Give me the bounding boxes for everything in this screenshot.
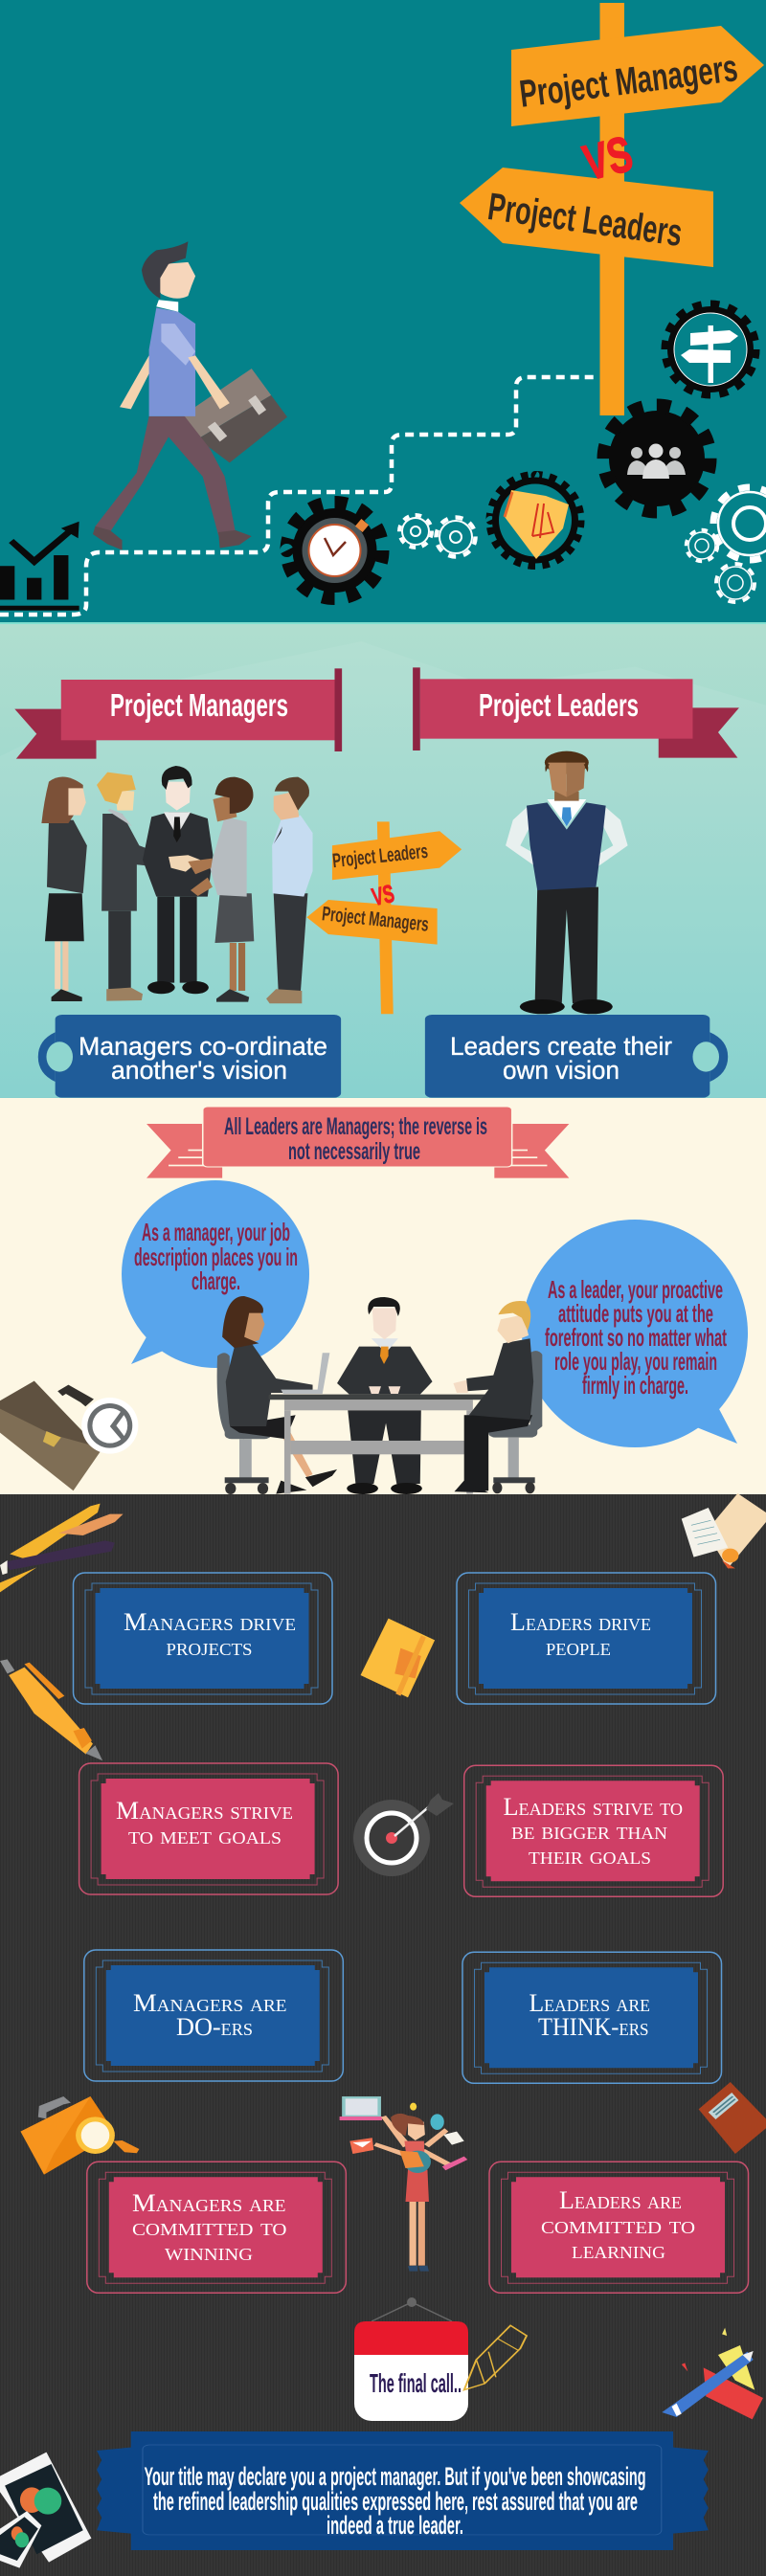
illustration: three people meeting at a table (217, 1296, 542, 1494)
tag: leaders vision (425, 1015, 728, 1098)
icon: white gears right edge (686, 487, 766, 602)
ribbon: all leaders are managers (146, 1107, 569, 1178)
icon: outlined pencil (464, 2325, 527, 2390)
small vs label: VS (370, 879, 396, 911)
ribbon: all leaders are managers: All Leaders are Managers; the reverse is (224, 1113, 487, 1140)
panel: hero signpost journey (0, 0, 766, 622)
illustration: group of five managers (41, 766, 313, 1003)
icon: smartphones with chat bubbles (0, 2453, 91, 2568)
hanging sign: the final call (354, 2297, 468, 2421)
icon: gear with stopwatch (287, 503, 383, 598)
card: managers drive projects (73, 1573, 332, 1704)
panel: meeting and speech bubbles (0, 1098, 766, 1494)
icon: gear with team (604, 406, 710, 511)
card: leaders strive to be bigger than their goals: their goals (529, 1842, 651, 1870)
icon: yellow notebook (361, 1619, 435, 1697)
small sign text: project leaders: Project Leaders (331, 840, 429, 872)
card: leaders drive people: Leaders drive (510, 1608, 651, 1636)
card: leaders drive people (457, 1573, 716, 1704)
icon: walking businessman with briefcase (93, 241, 287, 550)
card: leaders strive to be bigger than their goals (464, 1765, 723, 1896)
icon: coloured paper and pen (662, 2328, 763, 2419)
illustration: multitasking woman (340, 2096, 467, 2272)
card: managers are committed to winning (87, 2162, 346, 2293)
tag: leaders vision: Leaders create their (450, 1032, 672, 1061)
card: leaders drive people: people (546, 1633, 611, 1661)
tag: managers vision (38, 1015, 341, 1098)
icon: gear with notebook (490, 475, 580, 565)
card: leaders are committed to learning (489, 2162, 749, 2293)
background mountains (0, 641, 766, 1098)
speech bubble: manager: description places you in (134, 1243, 298, 1271)
ribbon heading: project leaders: Project Leaders (479, 687, 639, 723)
card: managers are committed to winning: winning (165, 2238, 253, 2266)
icon: orange briefcase with magnifier (20, 2096, 139, 2175)
card: leaders are committed to learning: Leaders are (559, 2186, 682, 2214)
icon: gear with signpost (665, 304, 755, 394)
card: leaders are think-ers (462, 1952, 722, 2083)
dashed staircase path (0, 377, 596, 615)
card: managers strive to meet goals: to meet goals (128, 1822, 282, 1849)
card: managers drive projects: Managers drive (124, 1608, 296, 1636)
ribbon: project managers (14, 668, 342, 759)
ribbon: project leaders (413, 667, 739, 758)
icon: growth chart (0, 522, 79, 611)
small sign text: project managers: Project Managers (321, 903, 430, 936)
speech bubble: manager: As a manager, your job (142, 1218, 290, 1246)
card: leaders are committed to learning: learning (572, 2236, 665, 2264)
small signpost (306, 821, 462, 1014)
tag: managers vision: another's vision (111, 1056, 287, 1085)
hanging sign: the final call: The final call.. (370, 2368, 462, 2398)
panel: dark comparison section (0, 1493, 766, 2576)
card: leaders are think-ers: Leaders are (529, 1989, 650, 2017)
card: leaders strive to be bigger than their goals: Leaders strive to (504, 1793, 683, 1821)
card: managers strive to meet goals: Managers strive (116, 1797, 293, 1825)
card: leaders are committed to learning: committed to (541, 2211, 695, 2239)
card: leaders are think-ers: THINK-ers (538, 2013, 649, 2041)
card: managers drive projects: projects (167, 1633, 253, 1661)
tag: leaders vision: own vision (503, 1056, 620, 1085)
card: managers strive to meet goals (79, 1763, 338, 1894)
banner: closing message (97, 2431, 709, 2550)
icon: target with arrow (353, 1793, 454, 1876)
illustration: project leader figure (506, 751, 628, 1014)
card: managers are do-ers: DO-ers (176, 2013, 253, 2041)
icon: red book (699, 2082, 766, 2154)
speech bubble: manager: charge. (192, 1266, 240, 1295)
card: leaders strive to be bigger than their goals: be bigger than (511, 1817, 667, 1845)
icon: pen (0, 1659, 102, 1760)
signpost (460, 3, 764, 415)
card: managers are do-ers: Managers are (133, 1989, 287, 2017)
icon: briefcase with clock (0, 1381, 138, 1490)
vs label: VS (578, 126, 638, 191)
icon: small white gears centre (399, 515, 475, 557)
speech bubble: leader (522, 1220, 748, 1447)
panel: managers and leaders vision (0, 622, 766, 1098)
tag: managers vision: Managers co-ordinate (79, 1032, 327, 1061)
card: managers are do-ers (84, 1950, 343, 2081)
icon: pencils (0, 1504, 124, 1592)
ribbon heading: project managers: Project Managers (110, 687, 288, 723)
speech bubble: manager (122, 1180, 309, 1368)
icon: certificate papers (682, 1493, 766, 1568)
card: managers are committed to winning: Managers are (132, 2189, 285, 2217)
card: managers are committed to winning: committed to (132, 2213, 287, 2241)
banner: closing message: indeed a true leader. (327, 2511, 463, 2540)
ribbon: all leaders are managers: not necessarily true (288, 1138, 420, 1165)
